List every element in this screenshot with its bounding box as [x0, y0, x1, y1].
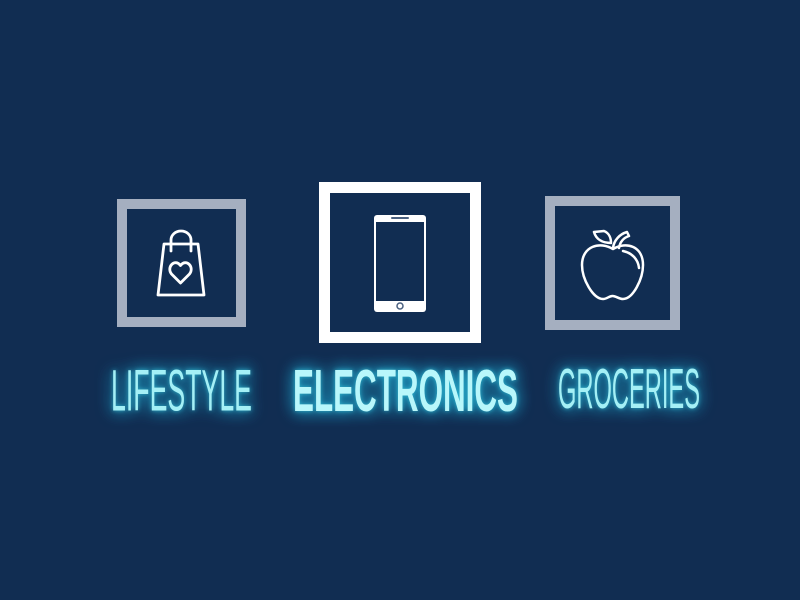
panel: lifestyle	[111, 204, 252, 424]
infographic canvas: LIFESTYLE	[111, 358, 252, 424]
lifestyle frame	[122, 204, 241, 322]
panel: groceries	[550, 201, 700, 421]
groceries frame	[550, 201, 675, 325]
electronics frame	[324, 188, 476, 338]
icon: shopping bag with heart	[158, 231, 204, 295]
icon: apple	[582, 231, 643, 299]
panel: electronics	[293, 188, 518, 424]
icon: smartphone	[374, 215, 426, 312]
electronics label: ELECTRONICS	[293, 358, 518, 424]
